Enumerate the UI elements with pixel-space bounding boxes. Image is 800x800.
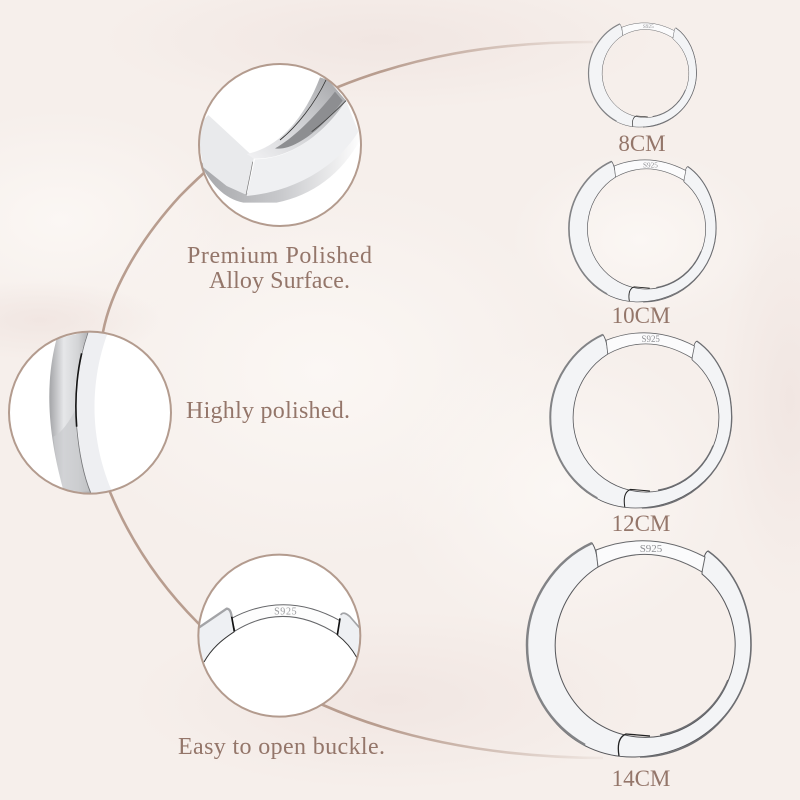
detail circle: polished alloy surface [197, 64, 363, 226]
caption: highly polished: Highly polished. [186, 398, 350, 424]
hoop earring: 8CM [589, 23, 696, 127]
caption: premium polished alloy surface: Alloy Surface. [209, 268, 350, 294]
hoop earring: 8CM: S925 [643, 24, 654, 30]
size label: 12CM: 12CM [612, 511, 670, 536]
detail circle: easy to open buckle [195, 555, 362, 717]
hoop earring: 14CM [527, 541, 751, 757]
caption: premium polished alloy surface: Premium Polished [187, 243, 372, 269]
size label: 8CM: 8CM [618, 131, 666, 156]
hoop earring: 12CM [550, 333, 732, 508]
connecting arc [95, 42, 603, 758]
size label: 10CM: 10CM [612, 303, 670, 328]
caption: easy to open buckle: Easy to open buckle. [178, 734, 385, 760]
size label: 14CM: 14CM [612, 766, 670, 791]
detail circle: easy to open buckle: S925 [274, 606, 297, 617]
hoop earring: 10CM: S925 [643, 161, 658, 169]
hoop earring: 14CM: S925 [640, 543, 663, 555]
caption: premium polished alloy surface [187, 243, 372, 294]
hoop earring: 12CM: S925 [642, 334, 660, 344]
hoop earring: 10CM [569, 160, 716, 302]
detail circle: highly polished [9, 332, 171, 494]
